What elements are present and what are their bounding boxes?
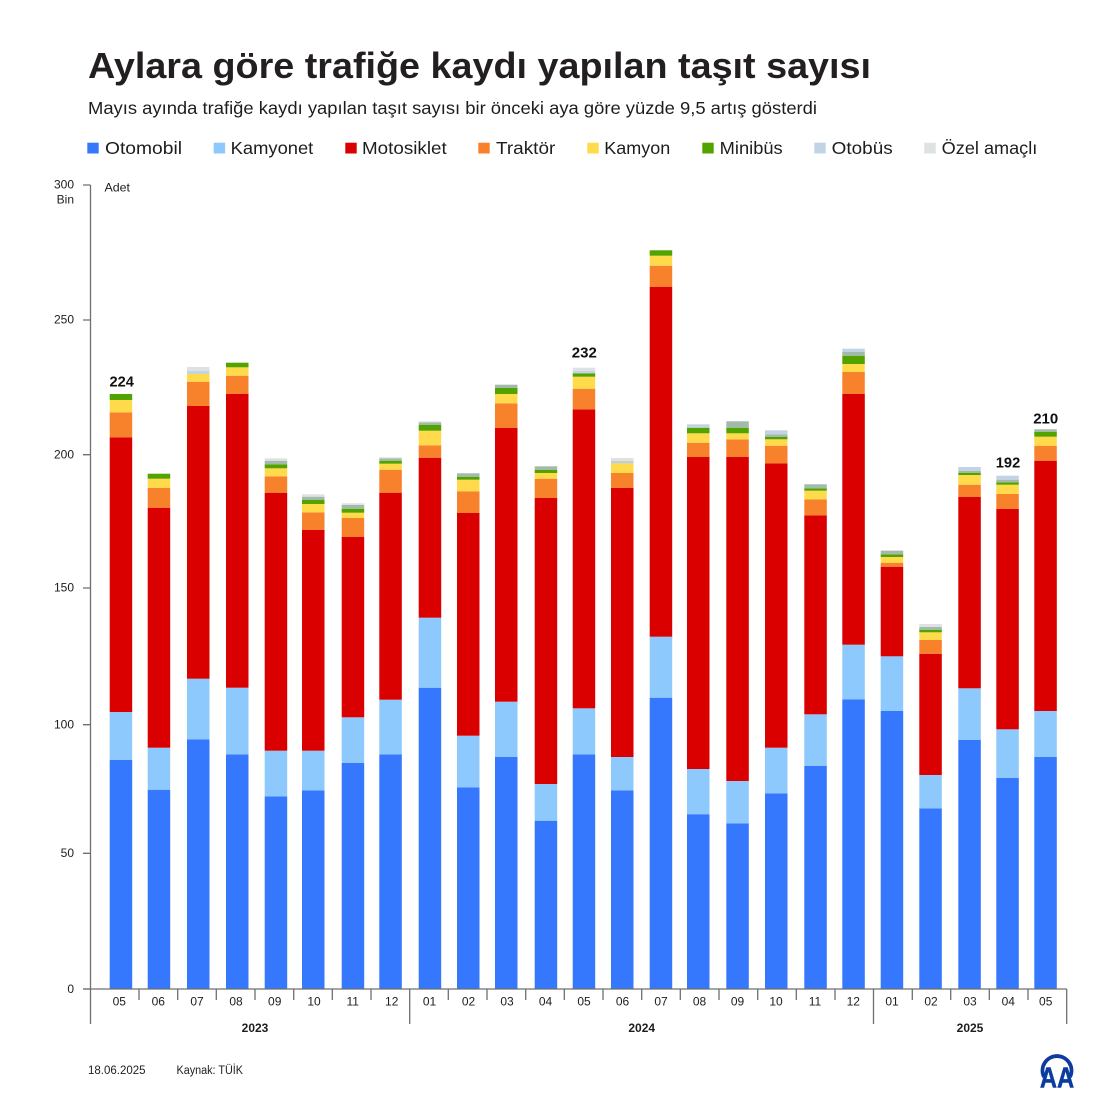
bar 2025-02	[919, 624, 942, 989]
x axis with month and year labels: 2023	[242, 1021, 269, 1035]
x axis with month and year labels: 12	[385, 994, 399, 1008]
x axis with month and year labels: 07	[190, 994, 204, 1008]
y axis with value labels: 200	[54, 448, 74, 462]
bar 2023-07	[187, 367, 210, 989]
y axis with value labels: 0	[67, 982, 74, 996]
legend item: Minibüs: Minibüs	[720, 138, 783, 158]
value label 232: 232	[572, 345, 597, 362]
x axis with month and year labels: 10	[769, 994, 783, 1008]
x axis with month and year labels: 08	[229, 994, 243, 1008]
x axis with month and year labels	[83, 989, 1067, 1035]
bar 2024-08	[687, 424, 710, 989]
bar 2024-03	[495, 385, 518, 989]
x axis with month and year labels: 05	[1039, 994, 1053, 1008]
x axis with month and year labels: 12	[847, 994, 860, 1008]
bar 2023-10	[302, 494, 324, 989]
value label 192: 192	[996, 454, 1020, 471]
x axis with month and year labels: 03	[500, 994, 514, 1008]
x axis with month and year labels: 07	[654, 994, 668, 1008]
x axis with month and year labels: 04	[1002, 994, 1015, 1008]
title: Aylara göre trafiğe kaydı yapılan taşıt sayısı	[88, 45, 871, 86]
bar 2025-05	[1034, 429, 1057, 989]
bar 2023-11	[342, 503, 364, 989]
bar 2023-12	[379, 457, 402, 989]
x axis with month and year labels: 03	[963, 994, 977, 1008]
x axis with month and year labels: 2024	[628, 1021, 655, 1035]
footer date: 18.06.2025	[88, 1065, 146, 1077]
y axis with value labels: 100	[54, 718, 74, 732]
unit label: Adet	[104, 180, 131, 194]
bar 2024-07	[650, 250, 672, 989]
bar 2023-06	[148, 474, 170, 989]
x axis with month and year labels: 04	[539, 994, 552, 1008]
x axis with month and year labels: 10	[307, 994, 321, 1008]
x axis with month and year labels: 09	[731, 994, 744, 1008]
bar 2023-05	[110, 394, 132, 989]
x axis with month and year labels: 11	[346, 994, 359, 1008]
icon: AA logo: AA	[1040, 1061, 1074, 1094]
y axis with value labels: Bin	[57, 192, 74, 206]
x axis with month and year labels: 2025	[957, 1021, 984, 1035]
subtitle: Mayıs ayında trafiğe kaydı yapılan taşıt sayısı bir önceki aya göre yüzde 9,5 artış gösterdi	[88, 98, 817, 118]
bar 2024-11	[804, 484, 827, 989]
legend item: Kamyon: Kamyon	[604, 138, 670, 158]
legend item: Özel amaçlı: Özel amaçlı	[942, 138, 1037, 158]
x axis with month and year labels: 08	[693, 994, 706, 1008]
x axis with month and year labels: 01	[885, 994, 899, 1008]
bar 2024-04	[535, 466, 557, 989]
y axis with value labels: 250	[54, 312, 74, 326]
y axis with value labels: 150	[54, 580, 74, 594]
bar 2023-09	[265, 458, 287, 989]
x axis with month and year labels: 02	[924, 994, 938, 1008]
stacked bar chart	[110, 250, 1057, 989]
bar 2025-04	[996, 476, 1019, 989]
bar 2023-08	[226, 363, 248, 989]
footer source: Kaynak: TÜİK	[176, 1064, 243, 1077]
x axis with month and year labels: 02	[462, 994, 475, 1008]
bar 2024-01	[419, 421, 441, 989]
x axis with month and year labels: 05	[113, 994, 126, 1008]
y axis with value labels	[54, 178, 90, 1024]
bar 2025-03	[958, 467, 981, 989]
y axis with value labels: 300	[54, 178, 74, 192]
x axis with month and year labels: 09	[268, 994, 282, 1008]
legend item: Otobüs: Otobüs	[832, 138, 893, 158]
y axis with value labels: 50	[61, 846, 74, 860]
legend item: Otomobil: Otomobil	[105, 138, 182, 158]
bar 2025-01	[881, 550, 903, 989]
legend	[87, 138, 1037, 158]
bar 2024-02	[457, 473, 480, 989]
x axis with month and year labels: 01	[423, 994, 436, 1008]
x axis with month and year labels: 06	[616, 994, 629, 1008]
value label 210: 210	[1033, 410, 1058, 427]
bar 2024-10	[765, 430, 788, 989]
legend item: Motosiklet: Motosiklet	[362, 138, 447, 158]
x axis with month and year labels: 11	[809, 994, 822, 1008]
bar 2024-06	[611, 458, 634, 989]
x axis with month and year labels: 05	[577, 994, 591, 1008]
legend item: Kamyonet: Kamyonet	[231, 138, 313, 158]
bar 2024-09	[726, 421, 749, 989]
bar 2024-12	[842, 349, 865, 989]
legend item: Traktör: Traktör	[496, 138, 555, 158]
x axis with month and year labels: 06	[152, 994, 165, 1008]
bar 2024-05	[573, 368, 595, 989]
value label 224: 224	[110, 374, 135, 391]
